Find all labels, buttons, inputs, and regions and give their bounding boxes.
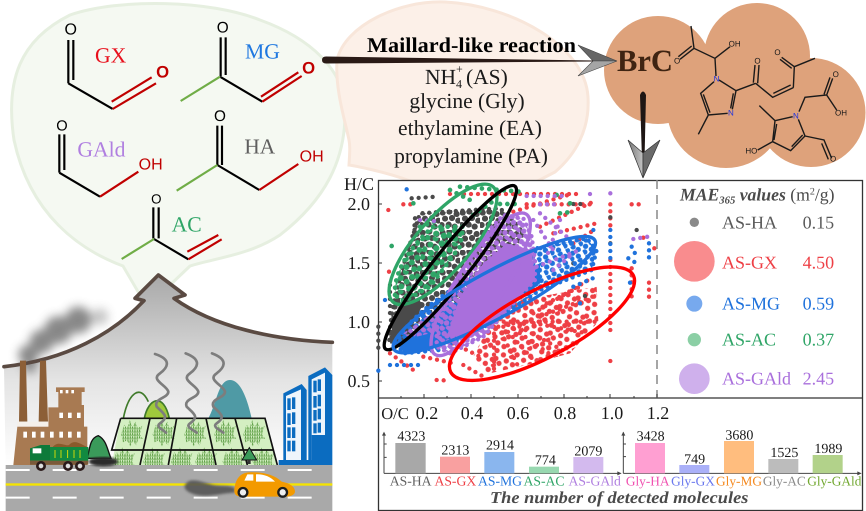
bar: Gly-MG xyxy=(716,428,762,489)
bar: Gly-MG: Gly-MG xyxy=(716,474,762,489)
legend title: /g) xyxy=(815,185,834,205)
molecule: BrC imidazole and pyrrole structures: O xyxy=(754,56,761,65)
legend title: (m xyxy=(790,185,834,205)
x axis labels: 0.4 xyxy=(461,403,483,423)
legend row: AS-GAld xyxy=(679,363,834,394)
legend row: AS-MG xyxy=(686,294,834,314)
molecule: BrC imidazole and pyrrole structures: HO xyxy=(745,146,757,155)
y axis labels: 1.5 xyxy=(348,253,370,273)
scatter chart xyxy=(372,169,654,402)
bar: Gly-HA: 3428 xyxy=(637,429,665,444)
bar: AS-MG xyxy=(478,438,522,489)
BrC label: BrC xyxy=(617,43,673,78)
bar: Gly-AC xyxy=(763,445,806,489)
molecule: MG xyxy=(181,19,315,102)
legend: MAE365 values xyxy=(674,185,834,394)
bar: AS-GX: 2313 xyxy=(441,442,469,458)
bar charts: number of detected molecules xyxy=(382,428,862,507)
legend title: values xyxy=(735,185,786,205)
bar: Gly-AC: Gly-AC xyxy=(763,474,806,489)
bar: Gly-AC: 1525 xyxy=(770,445,798,460)
x axis labels: 0.8 xyxy=(554,403,576,423)
molecule: BrC imidazole and pyrrole structures: OH xyxy=(835,108,847,117)
molecule: HA: O xyxy=(214,107,226,124)
bar: AS-GX xyxy=(434,442,476,489)
bar: Gly-GAld: Gly-GAld xyxy=(807,474,861,489)
legend row: AS-GAld: 2.45 xyxy=(803,369,834,389)
legend row: AS-GX: AS-GX xyxy=(722,253,777,273)
panel: reactants speech bubble xyxy=(337,2,588,185)
legend row: AS-MG: AS-MG xyxy=(722,294,780,314)
reactant text block xyxy=(367,33,576,168)
molecule: BrC imidazole and pyrrole structures: OH xyxy=(729,39,741,48)
panel: emission scene xyxy=(4,275,332,511)
bar: Gly-GAld xyxy=(807,441,861,489)
molecule: GX xyxy=(64,21,169,109)
panel: precursor speech bubble xyxy=(12,4,345,307)
heading: Maillard-like reaction: Maillard-like reaction xyxy=(367,33,576,57)
legend row: AS-MG: 0.59 xyxy=(803,294,834,314)
text: NH4+ (AS): (AS) xyxy=(466,65,508,89)
text: glycine: glycine (Gly) xyxy=(409,89,525,113)
upward arrow outline xyxy=(4,275,332,367)
bar: AS-HA: 4323 xyxy=(397,429,425,444)
molecule: HA: OH xyxy=(300,148,324,165)
molecule: AC: O xyxy=(151,192,162,206)
bar: Gly-GAld: 1989 xyxy=(814,441,842,456)
molecule: AC xyxy=(122,192,222,259)
molecule: BrC imidazole and pyrrole structures: O xyxy=(833,70,839,79)
molecule: BrC imidazole and pyrrole structures: N xyxy=(793,111,799,120)
molecule: AC: AC xyxy=(172,213,202,237)
x axis labels: O/C xyxy=(381,404,409,423)
bar: AS-GAld: 2079 xyxy=(574,443,602,459)
panel: van Krevelen plot and bar chart frame xyxy=(378,180,862,510)
molecule: GX: O xyxy=(156,63,169,81)
molecule: GAld: GAld xyxy=(77,138,125,162)
molecule: HA: HA xyxy=(244,134,275,158)
scatter: AS-HA gray xyxy=(378,197,637,350)
molecule: BrC imidazole and pyrrole structures: O xyxy=(674,56,680,65)
molecule: GX: O xyxy=(64,21,77,38)
legend row: AS-AC: AS-AC xyxy=(722,329,776,349)
legend row: AS-GAld: AS-GAld xyxy=(722,369,791,389)
bar: AS-MG: AS-MG xyxy=(478,473,522,489)
gradient atmosphere under arrow xyxy=(4,275,332,467)
bar: AS-GX: AS-GX xyxy=(434,473,476,489)
bar: AS-GAld xyxy=(568,443,621,489)
legend title: MAE xyxy=(680,185,719,205)
text: propylamine: propylamine (PA) xyxy=(394,144,548,168)
text: NH4+ (AS): + xyxy=(456,62,463,76)
bar: AS-AC: 774 xyxy=(535,452,556,468)
dump truck xyxy=(30,442,88,470)
trees xyxy=(87,436,257,464)
molecules: carbonyl precursors xyxy=(56,19,324,259)
crop field xyxy=(112,418,277,474)
legend row: AS-HA xyxy=(690,213,834,233)
bar: Gly-GX: Gly-GX xyxy=(671,474,715,489)
legend row: AS-HA: 0.15 xyxy=(803,213,834,233)
molecule: BrC imidazole and pyrrole structures: N xyxy=(714,75,719,84)
bar: AS-HA: AS-HA xyxy=(390,473,432,489)
y axis labels: H/C xyxy=(344,174,374,194)
x axis labels: 0.6 xyxy=(507,403,529,423)
molecule: BrC imidazole and pyrrole structures: N xyxy=(728,108,734,117)
truck exhaust xyxy=(89,457,118,466)
legend row: AS-AC xyxy=(688,329,834,349)
panel: brown carbon blob xyxy=(604,3,866,168)
y axis labels: 2.0 xyxy=(348,194,370,214)
bar: AS-AC: AS-AC xyxy=(523,473,565,489)
molecule: MG: O xyxy=(217,19,229,36)
highlight ellipses xyxy=(372,169,649,402)
bar: AS-MG: 2914 xyxy=(486,438,514,453)
bar: AS-AC xyxy=(523,452,565,489)
plot axes, divider and dashed limit xyxy=(378,180,862,398)
bar: Gly-HA: Gly-HA xyxy=(626,474,670,489)
factory xyxy=(13,387,87,465)
molecule: GAld: OH xyxy=(139,155,163,173)
scatter: AS-MG blue xyxy=(378,189,649,371)
bar: Gly-GX xyxy=(671,452,715,489)
x axis labels: 0.2 xyxy=(416,403,438,423)
y axis labels: 0.5 xyxy=(348,371,370,391)
molecule: GAld xyxy=(56,117,163,197)
bar: Gly-MG: 3680 xyxy=(725,428,753,443)
molecule: HA xyxy=(177,107,324,191)
molecule: GAld: O xyxy=(56,117,68,134)
legend row: AS-HA: AS-HA xyxy=(722,213,777,233)
scatter: AS-AC green xyxy=(392,187,573,340)
text: ethylamine: ethylamine (EA) xyxy=(398,116,542,140)
legend row: AS-GX xyxy=(674,241,834,282)
y axis labels: 1.0 xyxy=(348,312,370,332)
chimneys xyxy=(19,361,48,422)
y axis labels xyxy=(344,174,374,391)
text: NH4+ (AS): 4 xyxy=(456,77,462,91)
bar chart title: The number of detected molecules xyxy=(490,488,748,507)
molecule: GX: GX xyxy=(95,43,126,67)
factory smoke xyxy=(18,307,108,373)
molecule: BrC imidazole and pyrrole structures: O xyxy=(774,48,781,57)
buildings xyxy=(279,367,332,465)
road xyxy=(6,465,332,511)
car xyxy=(234,472,295,497)
arrow: precursors to BrC xyxy=(322,45,617,76)
bar: AS-HA xyxy=(390,429,432,489)
molecule: MG: O xyxy=(302,59,315,77)
text: NH4+ (AS): NH xyxy=(425,65,456,89)
bar: Gly-HA xyxy=(626,429,670,489)
text: NH4+ (AS) xyxy=(425,62,508,91)
scatter: AS-GX red xyxy=(388,193,654,381)
legend title: 365 xyxy=(719,194,735,206)
molecule: BrC imidazole and pyrrole structures: O xyxy=(830,154,836,163)
arrow: BrC to plot xyxy=(628,92,660,178)
molecule: MG: MG xyxy=(245,39,280,63)
hills behind field xyxy=(123,380,252,418)
x axis labels: 1.2 xyxy=(647,403,669,423)
bar: Gly-GX: 749 xyxy=(684,452,705,467)
legend row: AS-AC: 0.37 xyxy=(803,329,834,349)
rising gas wiggles xyxy=(155,353,225,433)
scatter: AS-GAld purple xyxy=(403,193,652,353)
x axis labels: 1.0 xyxy=(601,403,623,423)
bar: AS-GAld: AS-GAld xyxy=(568,473,621,489)
molecule: BrC imidazole and pyrrole structures xyxy=(674,26,847,163)
legend title: 2 xyxy=(810,186,815,197)
car exhaust xyxy=(185,480,235,496)
bar chart axes xyxy=(382,432,862,475)
legend row: AS-GX: 4.50 xyxy=(803,253,834,273)
x axis labels xyxy=(381,403,669,423)
